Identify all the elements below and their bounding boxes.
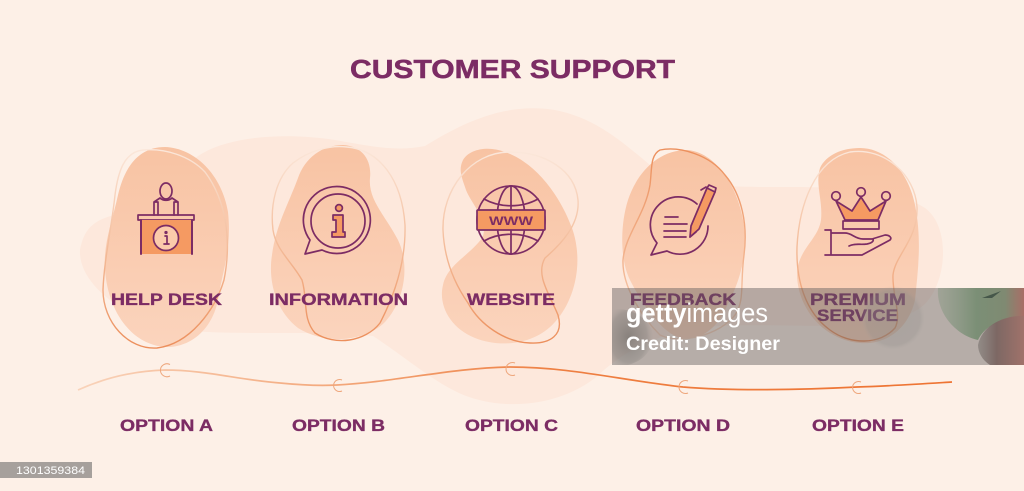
- option e: OPTION E: [812, 416, 904, 435]
- icon: help desk: [138, 183, 194, 254]
- icon: information: [303, 186, 370, 254]
- background large blob: [80, 108, 943, 404]
- column: premium service: [797, 148, 919, 343]
- blob: [622, 150, 745, 339]
- tag number: 1301359384: [16, 465, 85, 477]
- outline: [623, 149, 745, 339]
- outline: [797, 151, 917, 341]
- label: premium service second line: SERVICE: [817, 306, 898, 325]
- option a: OPTION A: [120, 416, 213, 435]
- timeline: [78, 362, 952, 394]
- column: help desk: [103, 147, 229, 348]
- watermark logo: gettyimages: [626, 298, 768, 328]
- blob: [442, 149, 577, 343]
- outline: [103, 150, 227, 348]
- watermark credit: Credit: Designer: [626, 334, 781, 355]
- outline: [443, 152, 578, 343]
- label: feedback: FEEDBACK: [630, 290, 737, 309]
- title: CUSTOMER SUPPORT: [350, 54, 675, 84]
- tag background: [0, 462, 92, 478]
- label: help desk: HELP DESK: [111, 290, 223, 309]
- watermark shapes: [612, 286, 1024, 365]
- www text: WWW: [489, 214, 534, 228]
- icon: crown and hand: [825, 188, 891, 255]
- blob: [797, 148, 919, 343]
- label: premium service: PREMIUM: [810, 290, 906, 309]
- column: website: [442, 149, 578, 343]
- option d: OPTION D: [636, 416, 730, 435]
- blob: [271, 145, 404, 339]
- watermark background: [612, 288, 1024, 365]
- watermark panel: [612, 286, 1024, 365]
- timeline line: [78, 367, 952, 390]
- label: website: WEBSITE: [467, 290, 555, 309]
- blob: [105, 147, 229, 347]
- column: feedback: [622, 149, 745, 339]
- timeline markers: [160, 362, 861, 394]
- option b: OPTION B: [292, 416, 385, 435]
- outline: [272, 147, 405, 341]
- option labels: [120, 416, 904, 435]
- label: information: INFORMATION: [269, 290, 408, 309]
- image id tag: [0, 462, 92, 478]
- icon: feedback: [650, 185, 716, 255]
- icon: website: [477, 186, 545, 254]
- option c: OPTION C: [465, 416, 558, 435]
- column: information: [269, 145, 408, 341]
